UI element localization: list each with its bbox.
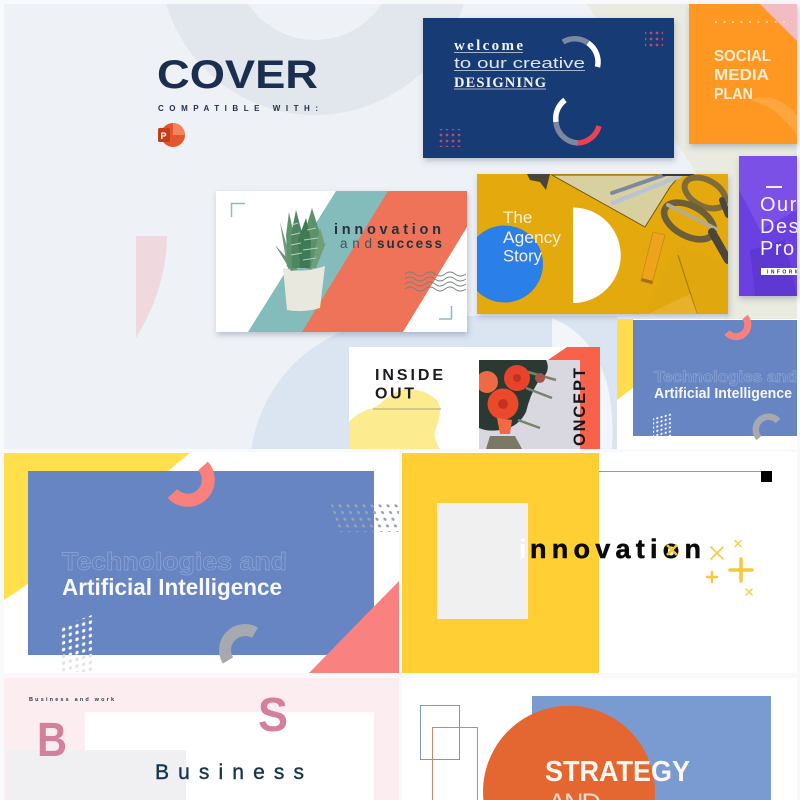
paper [552,175,680,227]
text: business and work: Business and work [29,697,115,703]
orange circle [483,706,655,800]
arc grey [225,630,255,660]
icon: PowerPoint [158,123,185,147]
text: social media plan [714,48,771,103]
text: welcome: DESIGNING [454,75,546,91]
image placeholder [437,503,528,619]
scissors [658,171,731,260]
text: technologies and: Technologies and [654,369,797,386]
text: artificial intelligence: Artificial Intelligence [654,386,792,402]
text: our design process: Pro [760,238,796,260]
yellow blob [348,390,440,449]
panel: inside out card [348,347,600,449]
text: the agency story: Story [503,246,542,266]
text: and success: and [340,236,372,251]
panel: welcome card [423,18,674,158]
photo: flowers [476,360,580,449]
text: inside out: OUT [375,386,414,402]
text: and success: success [377,236,442,251]
sparkle icons [707,540,752,595]
letter S: S [258,689,288,742]
panel: purple card: INFORM [767,270,799,276]
coral shape [548,347,600,449]
letter B: B [37,714,67,767]
decorative ring top [563,39,598,67]
dots right [330,502,399,532]
panel: small AI card [617,317,797,449]
text: innovation: i [519,534,527,564]
text: inside out [375,367,443,402]
pencils [612,174,692,203]
arc coral [727,317,748,337]
text: artificial intelligence: Artificial Intelligence [62,574,282,600]
text: strategy: STRATEGY [545,756,690,788]
text: the agency story [503,208,562,266]
dots [653,412,673,436]
text: the agency story: The [503,208,532,227]
panel: innovation and success card [216,191,467,332]
eraser [641,232,665,284]
subheading: compatible with: COMPATIBLE WITH: [158,104,318,113]
text: inside out: INSIDE [375,367,443,384]
text: and success [340,236,442,251]
text: our design process [760,197,797,255]
text: welcome: welcome [454,38,523,54]
panel: agency story card [466,171,731,314]
text: welcome: to our creative [454,55,585,72]
text: oncept: ONCEPT [571,368,589,446]
white half circle [573,208,621,303]
triangle coral [309,581,399,673]
corner bracket top [232,204,245,217]
arc grey [756,417,778,438]
black square [761,471,772,482]
dot grid right [645,30,663,48]
text: our design process: Our [760,194,798,216]
text: the agency story: Agency [503,228,562,247]
corner bracket bottom [439,306,452,319]
panel: large AI slide [4,452,399,673]
panel: cover background [4,4,797,449]
arc coral [172,466,208,500]
x in letter o [667,545,677,555]
text: welcome [454,38,585,91]
text: innovation: nnovation [530,534,701,564]
panel: innovation slide [402,452,797,673]
text: technologies and: Technologies and [62,548,287,576]
text: innovation: innovation [334,222,441,238]
text: social media plan: PLAN [714,86,753,103]
panel: social media plan card [689,4,797,144]
decorative ring bottom [556,100,599,143]
icon: PowerPoint: P [160,131,167,141]
illustration: potted plant [275,208,327,311]
wavy lines [405,272,466,291]
envelope [645,245,728,314]
panel: business slide [4,678,399,800]
outline rectangles [420,706,478,800]
panel: strategy slide [420,696,771,800]
text: social media plan: SOCIAL [714,48,771,65]
dot grid left [437,129,461,147]
text: social media plan: MEDIA [714,67,769,84]
text: business: Business [155,761,304,784]
panel: purple card [739,156,800,296]
clip [527,174,550,190]
heading: COVER: COVER [157,53,318,97]
dots left [60,615,92,655]
text: our design process: Des [760,216,800,238]
blue circle [477,226,543,302]
